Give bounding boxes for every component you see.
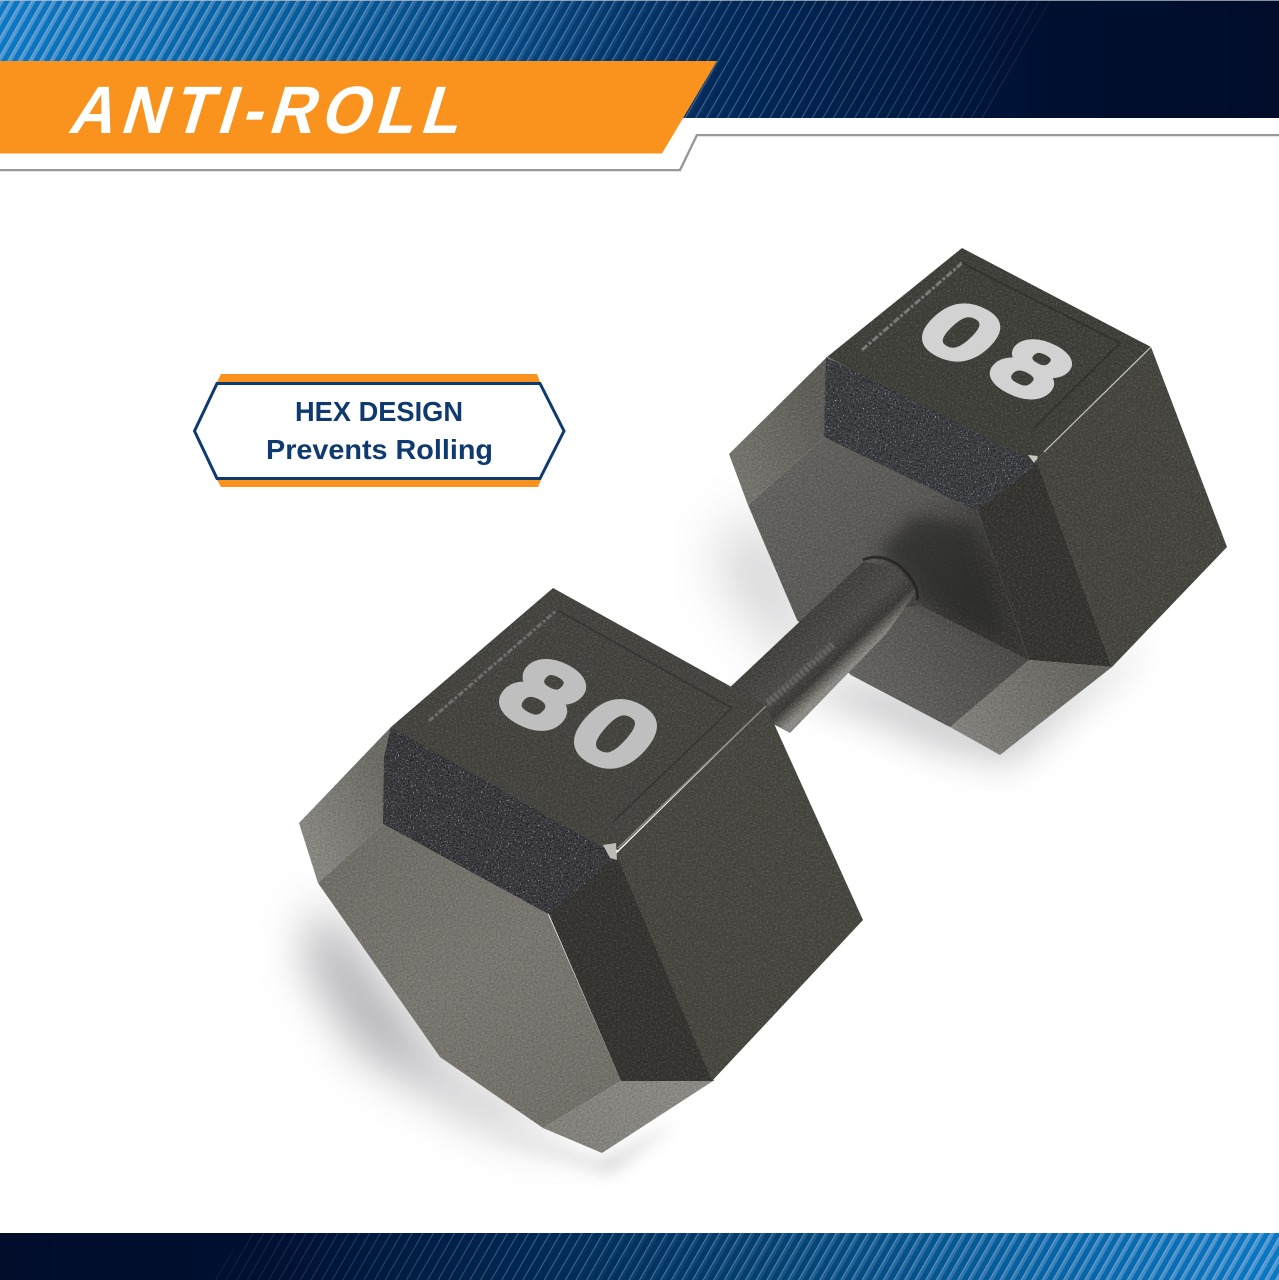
upper head: weight number: 08	[900, 285, 1093, 416]
callout orange top bar	[217, 374, 540, 382]
callout: hex design	[194, 374, 564, 487]
upper head: socket shade	[878, 515, 1005, 640]
upper hex head	[729, 248, 1227, 755]
title banner	[0, 61, 717, 154]
callout hexagon outline	[194, 384, 564, 478]
lower head: right face	[616, 706, 863, 1081]
lower head: textured chamfer	[383, 727, 618, 914]
dumbbell shadows	[305, 510, 1150, 1175]
handle: socket ring	[863, 557, 917, 600]
callout text line 2: Prevents Rolling	[266, 434, 493, 465]
upper head: silver recess line	[862, 263, 962, 350]
lower hex head	[299, 588, 863, 1153]
lower head: weight number: 80	[479, 639, 680, 790]
upper head: textured chamfer	[824, 357, 1038, 511]
dumbbell	[299, 248, 1227, 1153]
lower head: front hexagon	[318, 824, 621, 1128]
lower head: edge highlight	[618, 706, 766, 848]
upper head: edge highlight	[1044, 347, 1151, 452]
upper head: back face	[748, 437, 1029, 727]
upper head: bottom band	[950, 660, 1112, 755]
header outline strip	[0, 135, 1279, 170]
lower head: corner chip	[603, 843, 617, 860]
title: ANTI-ROLL	[62, 73, 475, 148]
handle	[725, 557, 917, 733]
lower head: inner dark face	[548, 854, 714, 1081]
upper head: inner dark face	[977, 462, 1112, 667]
callout text line 1: HEX DESIGN	[295, 396, 463, 427]
upper head: left chamfer	[729, 357, 827, 505]
upper head: dark recess lines	[962, 263, 1120, 428]
lower head: bottom band	[543, 1081, 713, 1153]
lower head: dark recess lines	[557, 610, 732, 822]
upper head: corner chip	[1028, 455, 1038, 463]
bottom banner	[0, 1233, 1279, 1280]
upper head: top face	[827, 248, 1151, 460]
lower head: left chamfer	[299, 727, 391, 883]
top banner	[0, 0, 1279, 118]
lower head: silver recess line	[429, 610, 557, 721]
white band under orange title	[0, 118, 1279, 169]
lower head: top face	[391, 588, 766, 850]
callout orange bottom bar	[217, 480, 541, 487]
handle: sparkle highlight	[768, 643, 835, 703]
upper head: right face	[1036, 347, 1227, 667]
